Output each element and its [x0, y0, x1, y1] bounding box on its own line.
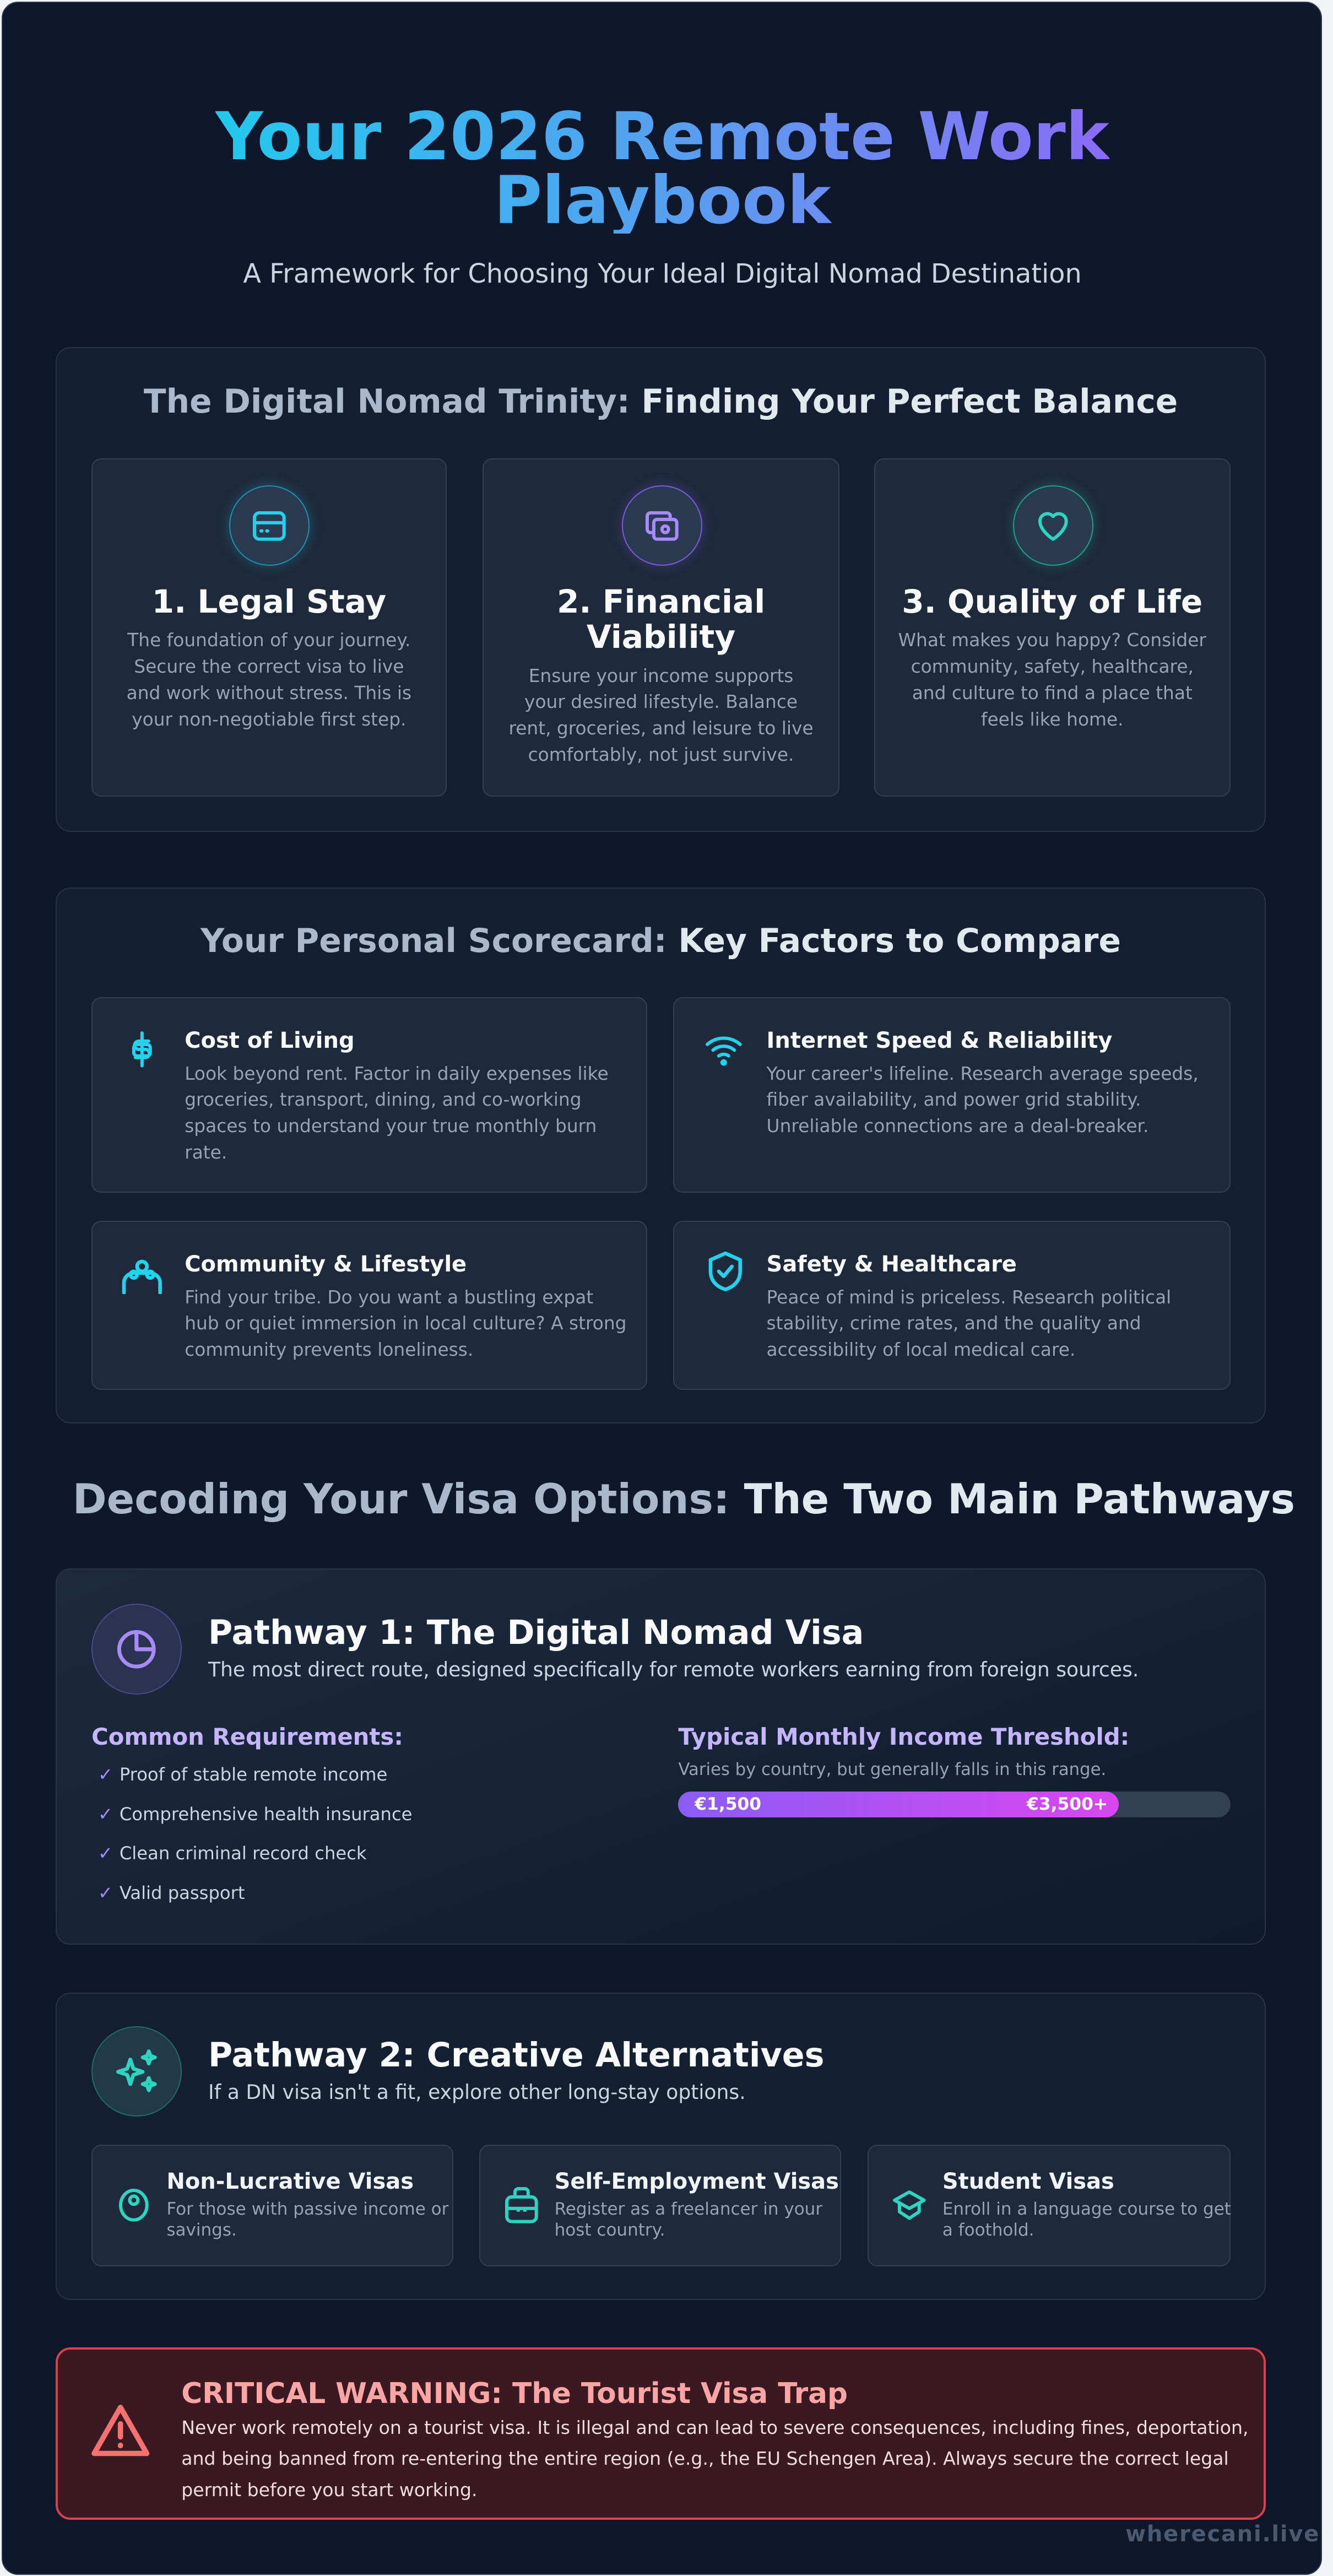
text: self-employment: host country.: [555, 2220, 665, 2240]
list: requirements: Comprehensive health insurance: [120, 1804, 413, 1825]
icon: id card: [229, 485, 310, 566]
list: requirements: Proof of stable remote income: [120, 1764, 387, 1785]
text: legal stay: Secure the correct visa to live: [134, 656, 404, 677]
text: community: Find your tribe. Do you want a bustling expat hub or quiet immersion in local culture? A strong community prevents loneliness.: [185, 1287, 626, 1360]
card: cost of living: [91, 997, 647, 1193]
heading: trinity: The Digital Nomad Trinity: Finding Your Perfect Balance: [144, 383, 1178, 421]
panel: pathway 2: [56, 1993, 1266, 2300]
panel: pathway 1: [56, 1568, 1266, 1945]
text: non-lucrative: For those with passive income or: [166, 2199, 448, 2219]
card: self-employment: [479, 2145, 841, 2266]
text: warning: [181, 2376, 1250, 2506]
icon: dollar: [132, 1031, 152, 1068]
text: pathway 2 header: [208, 2036, 825, 2104]
text: pathway 2 header: Pathway 2: Creative Alternatives: [208, 2036, 825, 2075]
list: requirements: [91, 1723, 413, 1903]
text: financial viability: Viability: [587, 618, 735, 656]
text: financial viability: 2. Financial: [557, 583, 765, 620]
text: quality of life: feels like home.: [981, 709, 1124, 730]
text: student: [942, 2169, 1225, 2241]
chart: income threshold: Varies by country, but generally falls in this range.: [678, 1760, 1106, 1779]
text: quality of life: What makes you happy? Consider: [898, 630, 1206, 651]
heading: visa options: Decoding Your Visa Options: The Two Main Pathways: [73, 1475, 1295, 1523]
icon: grad cap: [891, 2189, 928, 2221]
list: requirements: ✓: [98, 1843, 113, 1864]
icon: pie chart: [91, 1604, 182, 1695]
icon: shield: [708, 1252, 742, 1291]
icon: people: [122, 1259, 162, 1294]
text: pathway 2 header: If a DN visa isn't a fit, explore other long-stay options.: [208, 2080, 746, 2104]
title: [215, 99, 1109, 239]
icon: warning triangle: [89, 2402, 152, 2458]
text: non-lucrative: [166, 2169, 448, 2240]
text: legal stay: The foundation of your journey.: [127, 630, 410, 651]
text: safety: Peace of mind is priceless. Research political stability, crime rates, and the quality and accessibility of local medical care.: [767, 1287, 1171, 1360]
text: safety: [767, 1252, 1171, 1360]
bar: range: [678, 1792, 1231, 1817]
text: non-lucrative: savings.: [166, 2220, 237, 2240]
list: requirements: Valid passport: [120, 1882, 245, 1903]
text: community: [185, 1252, 626, 1360]
text: non-lucrative: Non-Lucrative Visas: [166, 2169, 414, 2194]
subtitle: A Framework for Choosing Your Ideal Digital Nomad Destination: [243, 259, 1082, 289]
text: self-employment: Register as a freelancer in your: [555, 2199, 822, 2219]
bar: range: €1,500: [695, 1794, 761, 1814]
panel: digital nomad trinity: [56, 347, 1266, 832]
text: legal stay: and work without stress. This is: [127, 683, 411, 703]
heading: scorecard: Your Personal Scorecard: Key Factors to Compare: [201, 922, 1121, 960]
text: quality of life: [898, 583, 1206, 730]
text: cost of living: Look beyond rent. Factor in daily expenses like groceries, transport, dining, and co-working spaces to understand your true monthly burn rate.: [185, 1063, 609, 1163]
text: community: Community & Lifestyle: [185, 1252, 467, 1277]
text: internet: Your career's lifeline. Research average speeds, fiber availability, and power grid stability. Unreliable connections are a deal-breaker.: [767, 1063, 1199, 1137]
card: community: [91, 1221, 647, 1390]
text: quality of life: and culture to find a place that: [912, 683, 1193, 703]
card: non-lucrative: [91, 2145, 453, 2266]
title: Playbook: [494, 163, 831, 239]
text: warning: CRITICAL WARNING: The Tourist Visa Trap: [181, 2377, 848, 2410]
text: pathway 1 header: [208, 1614, 1139, 1681]
list: requirements: ✓: [98, 1764, 113, 1785]
card: financial viability: [483, 458, 839, 797]
text: self-employment: Self-Employment Visas: [555, 2169, 839, 2194]
icon: coin: [119, 2189, 149, 2222]
text: pathway 1 header: Pathway 1: The Digital Nomad Visa: [208, 1614, 864, 1652]
icon: money: [622, 485, 702, 566]
list: requirements: Clean criminal record check: [120, 1843, 367, 1864]
text: self-employment: [555, 2169, 837, 2241]
text: legal stay: your non-negotiable first step.: [132, 709, 406, 730]
list: requirements: ✓: [98, 1804, 113, 1825]
card: legal stay: [91, 458, 447, 797]
text: safety: Safety & Healthcare: [767, 1252, 1017, 1277]
panel: personal scorecard: [56, 887, 1266, 1424]
text: cost of living: Cost of Living: [185, 1028, 355, 1053]
chart: income threshold: Typical Monthly Income Threshold:: [678, 1723, 1129, 1750]
icon: wifi: [706, 1037, 742, 1066]
text: student: Enroll in a language course to get: [942, 2199, 1231, 2219]
title: Your 2026 Remote Work: [215, 99, 1109, 175]
text: internet: [767, 1028, 1199, 1137]
text: quality of life: 3. Quality of Life: [902, 583, 1202, 620]
text: financial viability: your desired lifestyle. Balance: [524, 691, 798, 712]
text: pathway 1 header: The most direct route, designed specifically for remote workers earning from foreign sources.: [208, 1658, 1139, 1681]
icon: sparkles: [91, 2026, 182, 2117]
callout: critical warning: [56, 2347, 1266, 2520]
text: student: Student Visas: [942, 2169, 1114, 2194]
text: legal stay: [127, 583, 411, 730]
bar: range: €3,500+: [1027, 1794, 1108, 1814]
text: warning: Never work remotely on a tourist visa. It is illegal and can lead to severe consequences, including fines, deportation, and being banned from re-entering the entire region (e.g., the EU Schengen Area). Always secure the correct legal permit before you start working.: [181, 2417, 1249, 2501]
text: financial viability: comfortably, not just survive.: [528, 744, 794, 765]
text: student: a foothold.: [942, 2220, 1034, 2240]
text: legal stay: 1. Legal Stay: [152, 583, 386, 620]
icon: briefcase: [505, 2187, 538, 2223]
list: requirements: Common Requirements:: [91, 1723, 403, 1750]
icon: heart: [1013, 485, 1093, 566]
text: financial viability: [508, 583, 814, 765]
text: internet: Internet Speed & Reliability: [767, 1028, 1112, 1053]
card: internet: [673, 997, 1231, 1193]
chart: income threshold: [678, 1723, 1231, 1817]
text: financial viability: Ensure your income supports: [529, 665, 793, 686]
card: quality of life: [874, 458, 1231, 797]
text: financial viability: rent, groceries, and leisure to live: [508, 718, 814, 739]
watermark: wherecani.live: [1125, 2521, 1320, 2547]
list: requirements: ✓: [98, 1882, 113, 1903]
card: safety: [673, 1221, 1231, 1390]
card: student: [868, 2145, 1231, 2266]
text: quality of life: community, safety, healthcare,: [911, 656, 1194, 677]
